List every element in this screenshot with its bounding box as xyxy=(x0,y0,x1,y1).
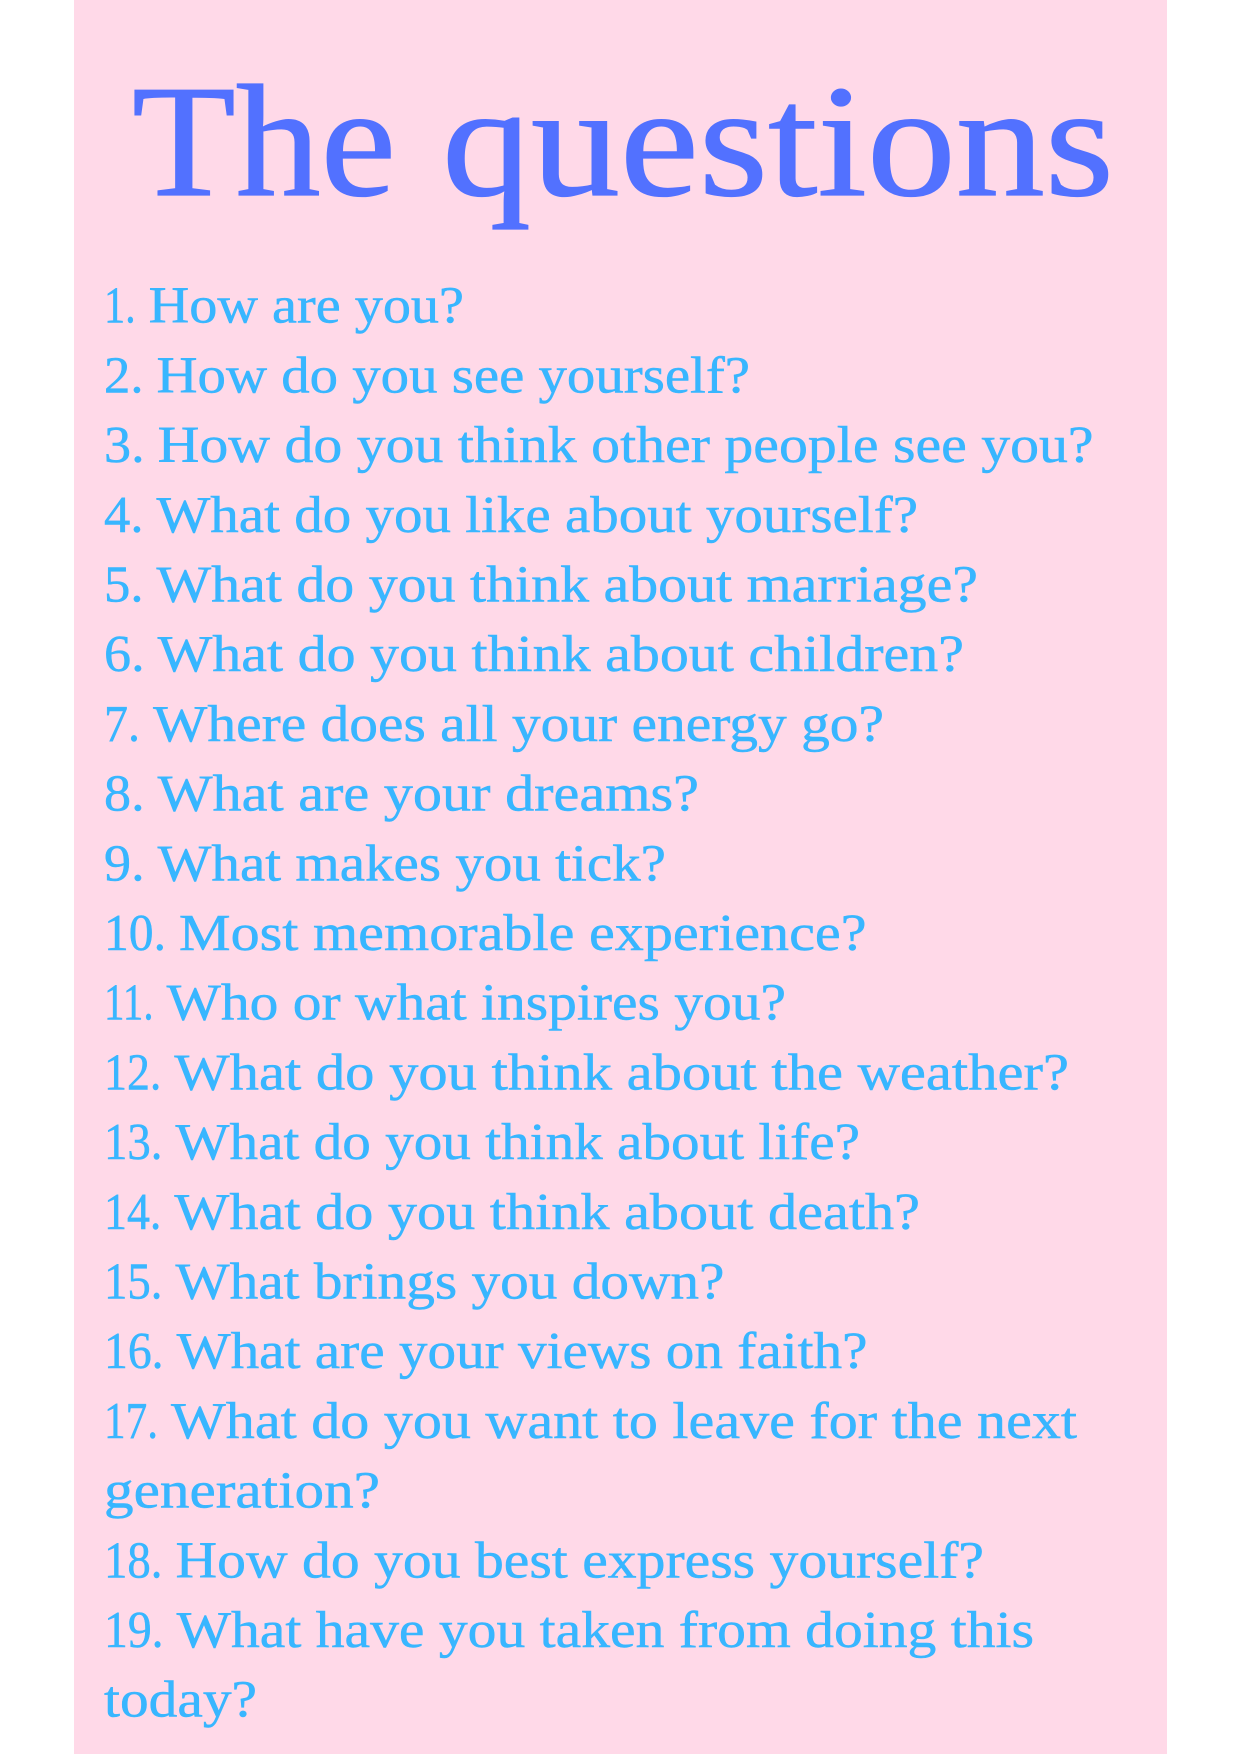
question 2: How do you see yourself? xyxy=(156,347,750,404)
question 5: What do you think about marriage? xyxy=(156,556,978,614)
question 1: 1. xyxy=(104,278,136,335)
question list xyxy=(104,278,1094,1729)
question 7: 7. xyxy=(104,696,140,753)
question 7: Where does all your energy go? xyxy=(153,696,884,753)
question 5: 5. xyxy=(104,556,144,614)
question 8: 8. xyxy=(104,766,145,823)
question 2: 2. xyxy=(104,347,144,404)
question 17: What do you want to leave for the next xyxy=(171,1393,1078,1450)
question 13: What do you think about life? xyxy=(176,1114,860,1171)
title: The xyxy=(132,52,396,230)
question 14: 14. xyxy=(104,1184,161,1241)
question 6: What do you think about children? xyxy=(158,626,964,683)
question 19 xyxy=(104,1602,1034,1729)
question 8: What are your dreams? xyxy=(158,766,699,823)
question 16: What are your views on faith? xyxy=(177,1323,868,1380)
question 11: 11. xyxy=(104,975,154,1032)
question 14: What do you think about death? xyxy=(174,1184,920,1241)
question 15: What brings you down? xyxy=(176,1254,724,1310)
question 12: 12. xyxy=(104,1044,161,1101)
question 3: How do you think other people see you? xyxy=(158,417,1094,474)
question 11: Who or what inspires you? xyxy=(167,975,786,1032)
question 9: What makes you tick? xyxy=(158,835,666,892)
question 17: 17. xyxy=(104,1393,158,1450)
question 19: What have you taken from doing this xyxy=(177,1602,1034,1659)
question 18: 18. xyxy=(104,1532,162,1589)
question 12: What do you think about the weather? xyxy=(174,1044,1069,1101)
question 17 xyxy=(104,1393,1078,1520)
question 1: How are you? xyxy=(149,278,464,335)
question 9: 9. xyxy=(104,835,145,892)
question 10: 10. xyxy=(104,905,166,962)
question 17: generation? xyxy=(104,1463,380,1520)
title: questions xyxy=(442,52,1114,230)
question 3: 3. xyxy=(104,417,145,474)
question 19: today? xyxy=(104,1672,257,1729)
question 6: 6. xyxy=(104,626,145,683)
question 16: 16. xyxy=(104,1323,164,1380)
title xyxy=(132,52,1114,230)
question 19: 19. xyxy=(104,1602,164,1659)
question 18: How do you best express yourself? xyxy=(176,1532,984,1589)
question 4: 4. xyxy=(104,487,144,544)
question 4: What do you like about yourself? xyxy=(156,487,918,544)
question 13: 13. xyxy=(104,1114,162,1171)
question 10: Most memorable experience? xyxy=(179,905,866,962)
question 15: 15. xyxy=(104,1254,162,1310)
